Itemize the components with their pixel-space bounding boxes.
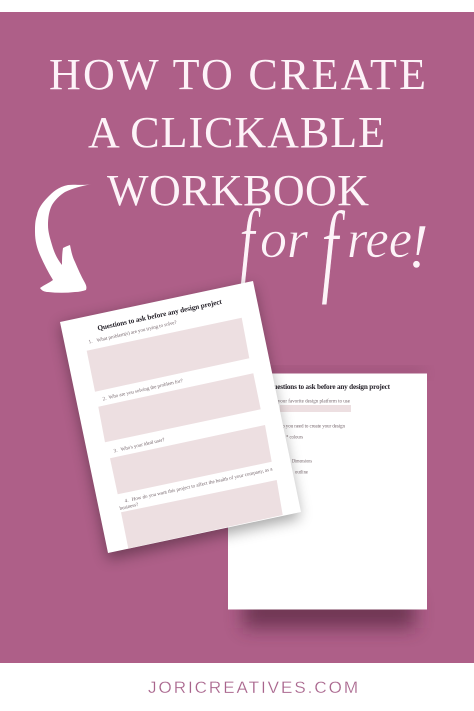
answer box 3	[110, 425, 272, 494]
script subtitle: for free	[239, 190, 429, 306]
title: A CLICKABLE	[88, 108, 385, 157]
question 1: What problem(s) are you trying to solve?	[96, 319, 178, 344]
script subtitle: for free: f	[321, 191, 346, 306]
script subtitle: for free: or	[260, 209, 309, 269]
question 1: 1.	[88, 339, 93, 345]
answer box 4	[121, 480, 283, 548]
back page heading: Questions to ask before any design project	[268, 383, 391, 391]
back page list item: outline: outline	[295, 470, 309, 476]
question 4: How do you want this project to affect the health of your company, as a	[131, 465, 274, 503]
front page heading: Questions to ask before any design project	[97, 298, 223, 332]
answer box 2	[98, 373, 261, 442]
icon: curved arrow	[35, 184, 92, 293]
back page list item: dimensions: Dimensions	[292, 458, 312, 464]
back page answer field	[280, 405, 351, 412]
title: HOW TO CREATE	[49, 50, 426, 99]
answer box 1	[87, 318, 249, 392]
question 3: Who's your ideal user?	[120, 437, 166, 453]
script subtitle: for free: ree	[347, 209, 412, 269]
question 4: business?	[119, 502, 140, 512]
question 4: 4.	[124, 498, 129, 504]
back page question 2: What do you need to create your design	[268, 424, 345, 430]
question 2: Who are you solving the problem for?	[108, 377, 184, 401]
panel: front worksheet page	[60, 281, 301, 553]
title	[49, 50, 426, 215]
script subtitle: for free: f	[239, 190, 262, 295]
question 2: 2.	[102, 396, 107, 402]
script subtitle: for free: !	[408, 213, 429, 281]
back page shadow	[232, 368, 424, 628]
panel: back worksheet page	[228, 374, 427, 610]
footer website: JORICREATIVES.COM	[148, 678, 358, 697]
title: WORKBOOK	[107, 166, 369, 215]
front page shadow	[60, 285, 300, 560]
question 3: 3.	[113, 448, 118, 454]
back page question 1: What is your favorite design platform to use	[261, 398, 351, 404]
back page list item: colours: * colours	[286, 434, 303, 440]
